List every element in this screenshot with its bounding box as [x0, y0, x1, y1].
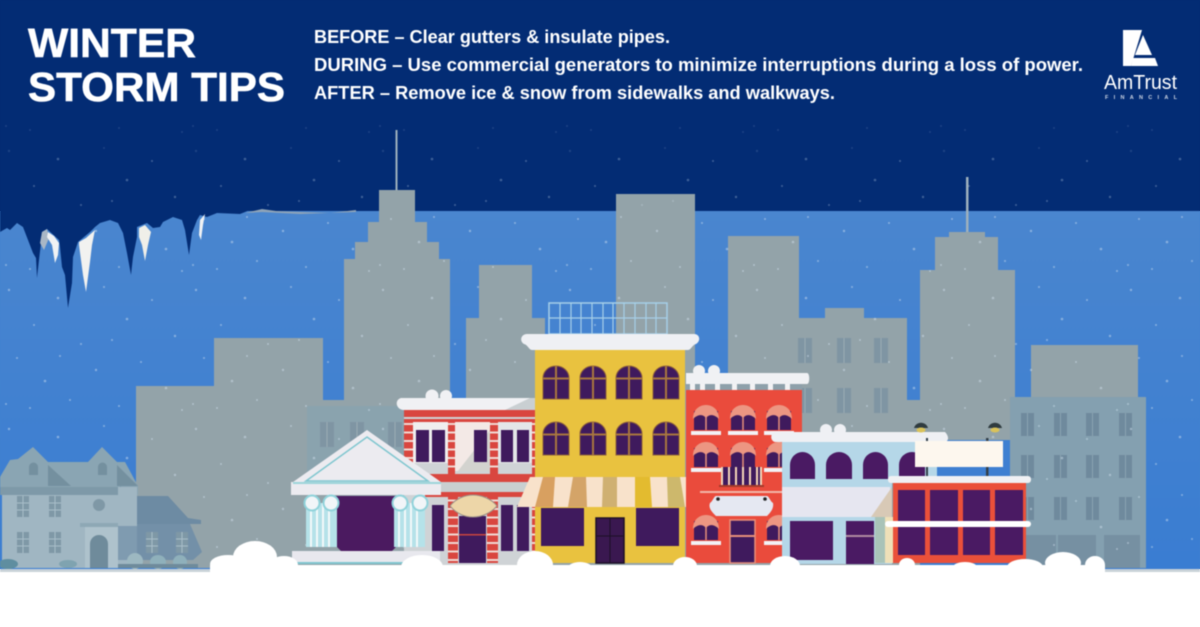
storm tips text block	[314, 27, 1083, 103]
billboard with street lamps	[914, 423, 1003, 478]
house side annex	[118, 486, 202, 569]
skyline: grey silhouette buildings	[136, 130, 1138, 568]
yellow building	[521, 303, 699, 563]
background building: right blue-grey block	[1010, 397, 1146, 568]
background building behind temple	[307, 406, 407, 476]
title	[28, 20, 285, 110]
storm tips text block: BEFORE – Clear gutters & insulate pipes.	[314, 27, 670, 47]
greek temple	[291, 430, 441, 564]
background building: mid-right windows	[798, 338, 888, 413]
AmTrust Financial logo	[1104, 30, 1178, 101]
falling snow dots	[0, 125, 1200, 551]
ground snow band	[0, 569, 1200, 627]
light blue building	[771, 424, 948, 564]
striped awning	[517, 477, 703, 507]
AmTrust Financial logo: FINANCIAL	[1105, 95, 1178, 101]
storm tips text block: DURING – Use commercial generators to minimize interruptions during a loss of power.	[314, 55, 1083, 75]
red storefront	[885, 476, 1031, 563]
title: STORM TIPS	[28, 64, 285, 110]
AmTrust Financial logo: AmTrust	[1104, 72, 1177, 94]
title: WINTER	[28, 20, 196, 66]
house on the left	[0, 447, 138, 569]
background: blue lower sky	[0, 211, 1200, 569]
background: night sky	[0, 0, 1200, 211]
red brick building	[397, 390, 536, 565]
red building with arched windows	[686, 365, 809, 563]
icicles hanging from the night sky	[0, 209, 356, 308]
snow drifts along the ground	[210, 541, 1105, 579]
ground edge shadow	[0, 569, 1200, 572]
storm tips text block: AFTER – Remove ice & snow from sidewalks and walkways.	[314, 83, 835, 103]
